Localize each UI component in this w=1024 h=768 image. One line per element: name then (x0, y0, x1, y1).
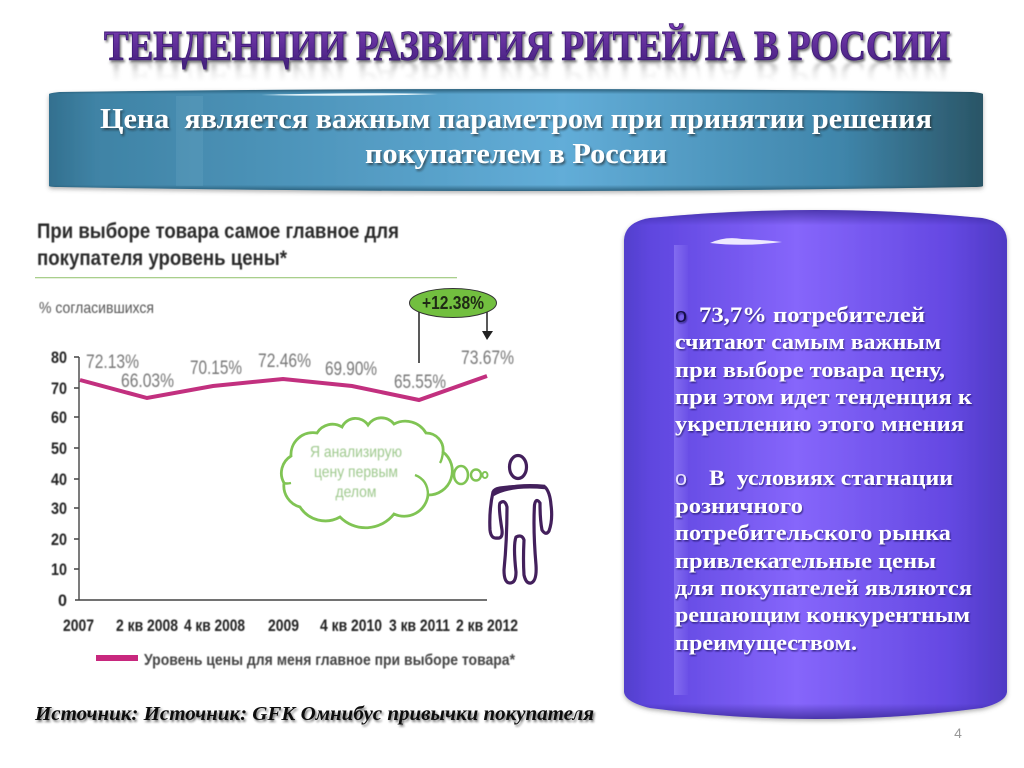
takeaway text 1: считают самым важным (675, 329, 941, 354)
y axis labels: 40 (51, 470, 67, 489)
x axis labels: 2009 (268, 616, 299, 635)
y axis labels: 80 (51, 348, 67, 367)
y axis caption: % согласившихся (39, 300, 154, 317)
takeaway text 2: для покупателей являются (675, 575, 972, 600)
icon: person (490, 456, 552, 583)
axes (74, 357, 487, 600)
panel: key takeaways (624, 210, 1007, 719)
chart heading: покупателя уровень цены* (37, 247, 288, 270)
y axis labels: 20 (51, 530, 67, 549)
takeaway text 1: o (675, 305, 687, 327)
cloud text: цену первым (314, 464, 398, 481)
data labels: 72.46% (258, 351, 311, 372)
page number: 4 (954, 725, 962, 741)
banner text: Цена является важным параметром при принятии решения (100, 103, 932, 135)
takeaway text 2: o (675, 468, 687, 490)
takeaway text 1: при этом идет тенденция к (675, 384, 972, 409)
legend: Уровень цены для меня главное при выборе товара* (144, 652, 516, 669)
cloud text (310, 444, 402, 501)
takeaway text 2: В условиях стагнации (709, 465, 953, 490)
callout: growth badge (410, 288, 496, 363)
takeaway text 2: розничного (675, 493, 803, 518)
chart panel (35, 220, 552, 669)
data labels: 66.03% (121, 371, 174, 392)
chart heading: При выборе товара самое главное для (37, 220, 399, 243)
y axis labels: 60 (51, 408, 67, 427)
y axis labels: 70 (51, 379, 67, 398)
x axis labels: 4 кв 2010 (320, 616, 382, 635)
cloud text: делом (336, 484, 376, 501)
callout: growth badge: +12.38% (422, 293, 484, 313)
line series (80, 376, 487, 400)
data labels: 70.15% (190, 358, 242, 379)
takeaway text 2 (675, 465, 972, 655)
takeaway text 2: потребительского рынка (675, 520, 951, 545)
banner text (100, 103, 932, 170)
x axis labels: 4 кв 2008 (184, 616, 245, 635)
y axis labels: 50 (51, 439, 67, 458)
x axis labels (63, 616, 518, 635)
data labels: 73.67% (461, 348, 514, 369)
takeaway text 2: решающим конкурентным (675, 602, 970, 627)
y axis labels: 10 (51, 560, 67, 579)
y axis labels: 0 (58, 591, 67, 610)
cloud text: Я анализирую (310, 444, 402, 461)
thought cloud (281, 418, 488, 528)
takeaway text 1 (675, 302, 972, 436)
takeaway text 1: 73,7% потребителей (699, 302, 925, 327)
data labels: 65.55% (394, 372, 446, 393)
y axis labels (51, 348, 67, 610)
takeaway text 2: привлекательные цены (675, 548, 936, 573)
panel: price banner (49, 89, 983, 191)
takeaway text 1: укреплению этого мнения (675, 411, 964, 436)
x axis labels: 2 кв 2012 (456, 616, 518, 635)
chart heading (37, 220, 399, 270)
data labels (86, 348, 514, 393)
x axis labels: 3 кв 2011 (389, 616, 450, 635)
banner text: покупателем в России (365, 138, 667, 170)
y axis labels: 30 (51, 499, 67, 518)
source note: Источник: Источник: GFK Омнибус привычки покупателя (34, 703, 594, 725)
x axis labels: 2007 (63, 616, 94, 635)
takeaway text 2: преимуществом. (675, 630, 857, 655)
data labels: 69.90% (325, 359, 377, 380)
data labels: 72.13% (86, 352, 139, 373)
takeaway text 1: при выборе товара цену, (675, 357, 945, 382)
x axis labels: 2 кв 2008 (116, 616, 178, 635)
